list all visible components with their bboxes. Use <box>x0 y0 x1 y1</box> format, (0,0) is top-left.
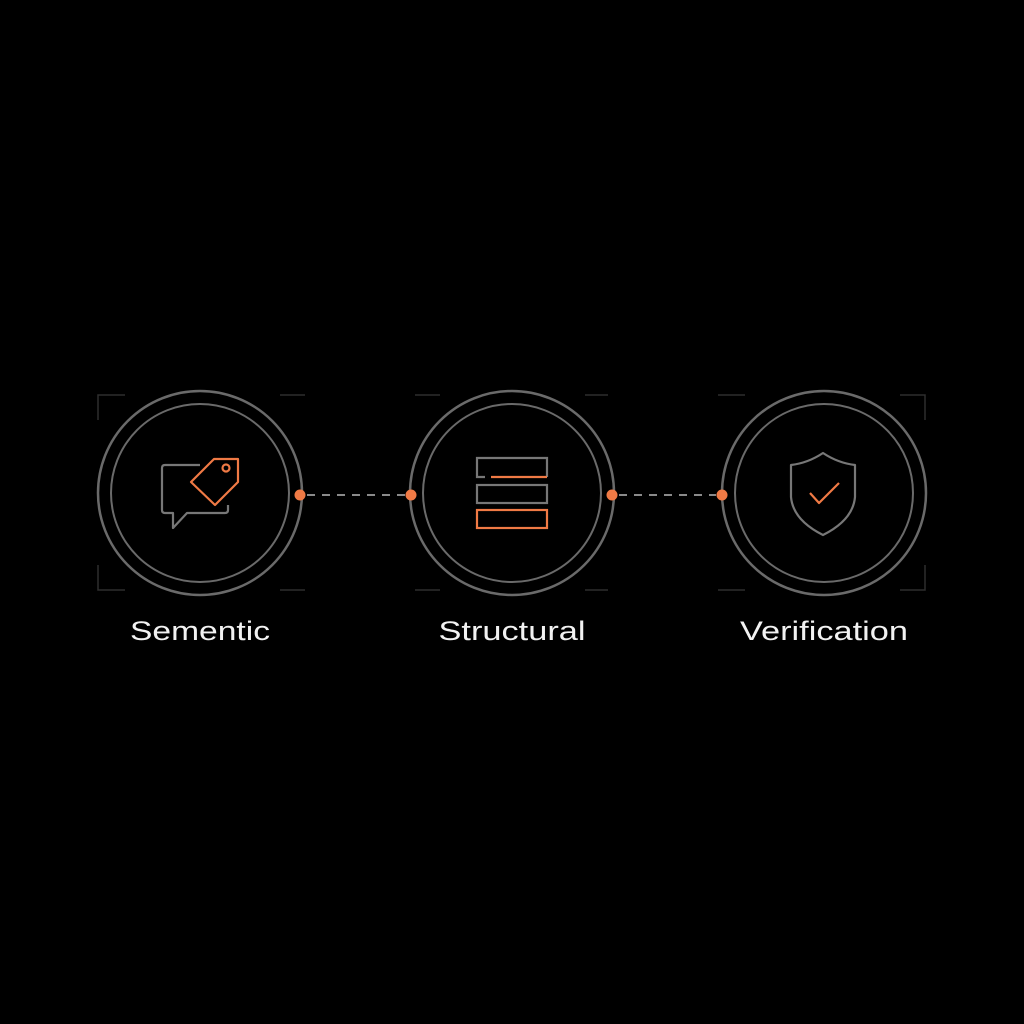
connector: 2 to 3 <box>606 490 728 500</box>
panel: Sementic <box>98 391 302 646</box>
panel: Verification <box>722 391 926 646</box>
connector: 1 to 2 <box>294 490 416 500</box>
label: Verification: Verification <box>740 616 908 646</box>
icon: shield check <box>791 453 855 535</box>
icon: stacked layers <box>477 458 547 528</box>
icon: chat bubble with tag <box>162 459 238 528</box>
label: Structural: Structural <box>438 616 586 646</box>
panel: Structural <box>410 391 614 646</box>
corner brackets <box>98 395 925 590</box>
label: Sementic: Sementic <box>130 616 270 646</box>
